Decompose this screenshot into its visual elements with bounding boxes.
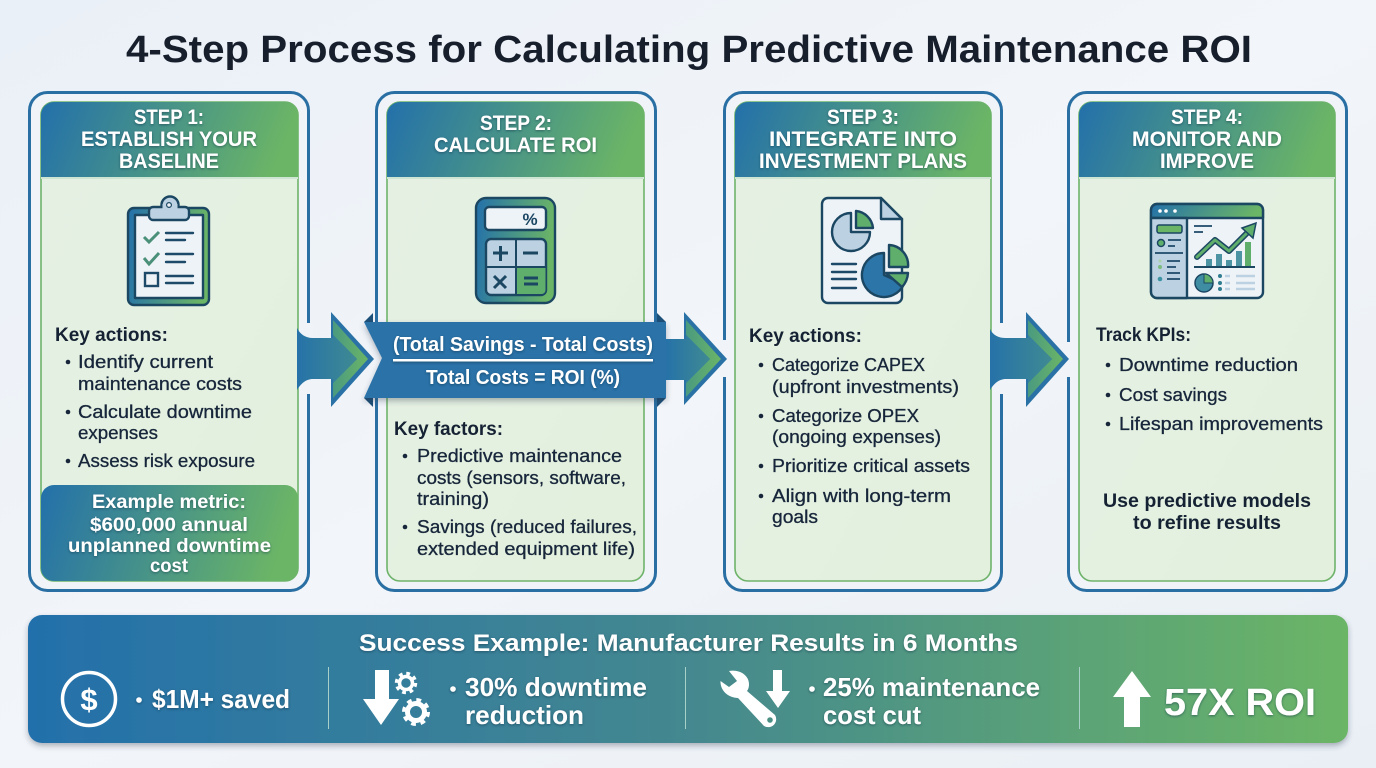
icon: calculator xyxy=(476,198,555,303)
panel: step 3 xyxy=(724,92,1002,590)
stat: downtime reduction: 30% downtime xyxy=(465,672,647,702)
step 1 key actions xyxy=(55,325,255,471)
step 2 key factors: Key factors: xyxy=(394,419,503,440)
step 3 header xyxy=(735,102,991,179)
callout: example metric xyxy=(41,485,298,581)
icon: wrench and down arrow xyxy=(720,670,790,727)
step 4 track KPIs: Track KPIs: xyxy=(1096,325,1191,346)
stat: ROI: 57X ROI xyxy=(1164,682,1316,724)
formula ribbon xyxy=(364,313,666,407)
step 4 track KPIs: Cost savings xyxy=(1119,385,1227,405)
icon: calculator: % xyxy=(522,210,538,229)
step 2 key factors: extended equipment life) xyxy=(417,539,635,559)
step 1 heading: BASELINE xyxy=(119,150,219,173)
step 1 header xyxy=(41,102,298,179)
step 2 key factors: training) xyxy=(417,489,489,509)
step 3 key actions: Align with long-term xyxy=(772,486,951,506)
icon: clipboard xyxy=(128,196,209,305)
step 3 heading: INTEGRATE INTO xyxy=(769,128,957,151)
step 4 track KPIs: Downtime reduction xyxy=(1119,355,1298,375)
step 2 key factors: Predictive maintenance xyxy=(417,446,622,466)
formula ribbon: (Total Savings - Total Costs) xyxy=(393,334,653,356)
formula ribbon: Total Costs = ROI (%) xyxy=(426,367,620,389)
step 3 key actions: (ongoing expenses) xyxy=(772,427,941,447)
step 3 key actions: (upfront investments) xyxy=(772,377,959,397)
step 4 heading: MONITOR AND xyxy=(1132,128,1282,151)
step 4 track KPIs xyxy=(1096,325,1323,434)
step 3 heading: STEP 3: xyxy=(827,106,899,129)
step 2 heading xyxy=(434,112,597,157)
step 4 header xyxy=(1079,102,1335,179)
banner heading: Success Example: Manufacturer Results in 6 Months xyxy=(359,630,1018,657)
arrow: step 3 to step 4 xyxy=(990,312,1072,407)
step 1 heading xyxy=(81,106,257,173)
step 3 heading: INVESTMENT PLANS xyxy=(759,150,967,173)
step 4 note: Use predictive models xyxy=(1103,491,1311,512)
step 3 key actions: Categorize CAPEX xyxy=(772,355,925,375)
stat: maintenance cost cut xyxy=(809,672,1040,730)
step 2 heading: CALCULATE ROI xyxy=(434,134,597,157)
step 3 key actions: Prioritize critical assets xyxy=(772,456,970,476)
step 1 key actions: Assess risk exposure xyxy=(78,451,255,471)
step 3 key actions: Key actions: xyxy=(749,326,862,347)
step 2 key factors: costs (sensors, software, xyxy=(417,468,626,488)
icon: report with pie charts xyxy=(822,198,908,303)
stat: downtime reduction xyxy=(450,672,647,730)
step 2 key factors: Savings (reduced failures, xyxy=(417,517,637,537)
panel: success example banner xyxy=(28,615,1348,743)
step 2 key factors xyxy=(394,419,637,559)
step 1 key actions: maintenance costs xyxy=(78,374,242,394)
title: 4-Step Process for Calculating Predictive Maintenance ROI xyxy=(126,29,1252,71)
step 1 heading: STEP 1: xyxy=(134,106,204,129)
icon: up arrow xyxy=(1113,671,1151,727)
callout: example metric: cost xyxy=(150,556,189,577)
callout: example metric: Example metric: xyxy=(92,492,246,513)
step 1 key actions: expenses xyxy=(78,423,158,443)
step 3 key actions xyxy=(749,326,970,527)
step 1 heading: ESTABLISH YOUR xyxy=(81,128,257,151)
stat: downtime reduction: reduction xyxy=(465,700,584,730)
stat: maintenance cost cut: cost cut xyxy=(823,700,921,730)
step 4 note xyxy=(1103,491,1311,534)
arrow: step 2 to step 3 xyxy=(666,312,728,405)
arrow: step 1 to step 2 xyxy=(297,312,381,407)
step 3 key actions: goals xyxy=(772,507,818,527)
stat: savings: $1M+ saved xyxy=(152,684,290,714)
step 3 key actions: Categorize OPEX xyxy=(772,406,919,426)
stat: maintenance cost cut: 25% maintenance xyxy=(823,672,1040,702)
step 4 heading: IMPROVE xyxy=(1160,150,1254,173)
step 4 track KPIs: Lifespan improvements xyxy=(1119,414,1323,434)
panel: step 4 xyxy=(1068,92,1346,590)
icon: dollar coin: $ xyxy=(80,682,98,717)
icon: analytics dashboard xyxy=(1151,204,1263,298)
step 1 key actions: Calculate downtime xyxy=(78,402,252,422)
step 2 header xyxy=(387,102,644,179)
step 3 heading xyxy=(759,106,967,173)
step 1 key actions: Identify current xyxy=(78,352,213,372)
panel: step 2 xyxy=(376,92,656,590)
step 4 note: to refine results xyxy=(1133,513,1281,534)
step 2 heading: STEP 2: xyxy=(480,112,552,135)
icon: downtime arrow and gears xyxy=(363,670,428,725)
icon: dollar coin xyxy=(62,672,116,726)
callout: example metric: $600,000 annual xyxy=(90,515,248,536)
step 4 heading xyxy=(1132,106,1282,173)
step 1 key actions: Key actions: xyxy=(55,325,168,346)
step 4 heading: STEP 4: xyxy=(1171,106,1243,129)
panel: step 1 xyxy=(30,92,308,590)
callout: example metric: unplanned downtime xyxy=(68,536,271,557)
